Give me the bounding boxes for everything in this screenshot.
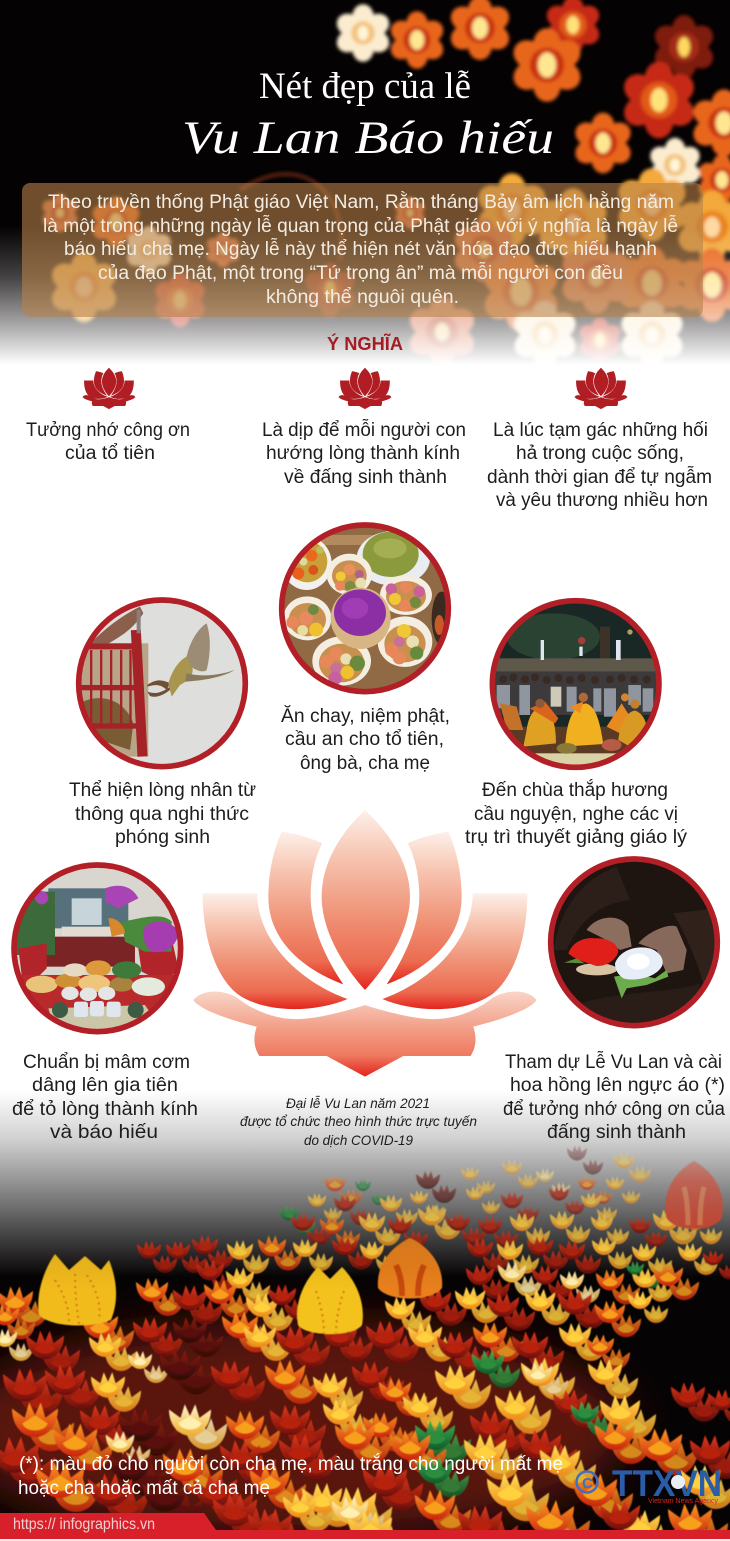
- caption: roses: Tham dự Lễ Vu Lan và cài: [505, 1051, 722, 1073]
- TTXVN logo: Vietnam News Agency: [648, 1498, 718, 1505]
- footer band with URL: [0, 1513, 730, 1541]
- icon: lotus: [575, 368, 627, 408]
- photo: monks praying at the pagoda: [487, 597, 667, 777]
- photo: releasing a bird from a cage: [73, 593, 253, 773]
- meaning 3: [487, 368, 712, 511]
- central lotus: [193, 810, 537, 1077]
- title: Vu Lan Báo hiếu: [182, 112, 554, 164]
- TTXVN logo: C: [582, 1475, 593, 1492]
- caption: bird release: [69, 780, 256, 848]
- photo: hands with red and white roses: [548, 856, 720, 1028]
- meaning 2: Là dịp để mỗi người con: [262, 419, 466, 441]
- intro panel: [22, 183, 703, 317]
- footer band with URL: https:// infographics.vn: [13, 1516, 155, 1533]
- caption: pagoda: cầu nguyện, nghe các vị: [474, 804, 678, 825]
- caption: roses: để tưởng nhớ công ơn của: [503, 1099, 725, 1120]
- footnote: [18, 1453, 563, 1499]
- caption: roses: [503, 1051, 725, 1143]
- caption: bird release: Thể hiện lòng nhân từ: [69, 780, 256, 801]
- footnote: hoặc cha hoặc mất cả cha mẹ: [18, 1478, 270, 1499]
- intro panel: của đạo Phật, một trong “Tứ trọng ân” mà mỗi người con đều: [98, 262, 623, 284]
- footnote: (*): màu đỏ cho người còn cha mẹ, màu trắng cho người mất mẹ: [19, 1453, 563, 1475]
- caption: altar: để tỏ lòng thành kính: [12, 1099, 198, 1120]
- meaning 1: Tưởng nhớ công ơn: [26, 420, 190, 441]
- caption: food: Ăn chay, niệm phật,: [281, 706, 450, 727]
- caption: food: ông bà, cha mẹ: [300, 753, 430, 774]
- lantern: red faded right: [665, 1161, 723, 1229]
- lantern: big yellow left: [38, 1254, 116, 1325]
- caption: altar: dâng lên gia tiên: [32, 1075, 178, 1096]
- lantern: big yellow centre: [297, 1267, 363, 1334]
- caption: pagoda: Đến chùa thắp hương: [482, 779, 668, 801]
- lotus caption: được tổ chức theo hình thức trực tuyến: [240, 1113, 477, 1129]
- meaning 3: và yêu thương nhiều hơn: [496, 490, 708, 511]
- photo: ancestral altar offering: [8, 858, 188, 1042]
- caption: roses: hoa hồng lên ngực áo (*): [510, 1075, 725, 1096]
- meaning 2: về đấng sinh thành: [284, 467, 447, 488]
- TTXVN logo: TTXVN: [612, 1463, 722, 1504]
- icon: lotus: [83, 368, 135, 408]
- caption: pagoda: [465, 779, 688, 848]
- intro panel: không thể nguôi quên.: [266, 287, 459, 308]
- meaning 2: [262, 368, 466, 488]
- caption: bird release: phóng sinh: [115, 827, 210, 848]
- title: Nét đẹp của lễ: [259, 66, 471, 107]
- lantern: big orange centre: [378, 1238, 442, 1298]
- header photo: floating flower lanterns: [0, 0, 730, 372]
- caption: food: cầu an cho tổ tiên,: [285, 729, 444, 750]
- meaning 2: hướng lòng thành kính: [266, 443, 460, 464]
- photo: vegetarian food bowls: [277, 522, 453, 698]
- title: [182, 66, 554, 164]
- caption: altar: và báo hiếu: [50, 1122, 158, 1143]
- icon: lotus: [339, 368, 391, 408]
- meaning 3: hả trong cuộc sống,: [516, 443, 684, 464]
- intro panel: báo hiếu cha mẹ. Ngày lễ này thể hiện nét văn hóa đạo đức hiếu hạnh: [64, 238, 657, 260]
- caption: altar: Chuẩn bị mâm cơm: [23, 1052, 190, 1073]
- caption: pagoda: trụ trì thuyết giảng giáo lý: [465, 827, 688, 848]
- caption: bird release: thông qua nghi thức: [75, 804, 249, 825]
- lotus caption: Đại lễ Vu Lan năm 2021: [286, 1095, 430, 1111]
- lotus caption: do dịch COVID-19: [304, 1132, 413, 1148]
- footer photo: field of flower lanterns: [0, 1090, 730, 1541]
- meaning 3: Là lúc tạm gác những hối: [493, 420, 708, 441]
- meaning 1: của tổ tiên: [65, 443, 155, 464]
- section heading: Ý NGHĨA: [327, 333, 403, 354]
- meaning 1: [26, 368, 190, 464]
- meaning 3: dành thời gian để tự ngẫm: [487, 466, 712, 488]
- caption: food: [281, 706, 450, 774]
- caption: roses: đấng sinh thành: [547, 1122, 686, 1143]
- caption: altar: [12, 1052, 198, 1143]
- intro panel: là một trong những ngày lễ quan trọng của Phật giáo với ý nghĩa là ngày lễ: [43, 215, 678, 237]
- intro panel: Theo truyền thống Phật giáo Việt Nam, Rằm tháng Bảy âm lịch hằng năm: [48, 191, 674, 213]
- lotus caption: [240, 1095, 477, 1148]
